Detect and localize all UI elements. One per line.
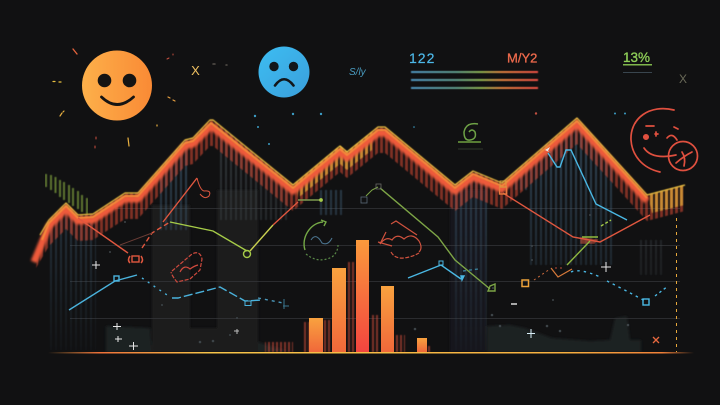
horizontal grid lines xyxy=(70,208,680,318)
bar chart xyxy=(265,240,432,352)
green circular arrow icon xyxy=(304,220,338,260)
red x marker xyxy=(653,337,659,343)
stat rules xyxy=(411,71,538,89)
faint specks xyxy=(109,214,629,343)
stat label 13% xyxy=(623,50,652,73)
sparkle marks around faces xyxy=(53,49,227,148)
mountain line chart band xyxy=(34,118,685,268)
stat label 122: 122 xyxy=(409,50,435,66)
stat label 13%: 13% xyxy=(623,50,650,65)
blue trend line left xyxy=(69,275,289,310)
sad face icon xyxy=(258,46,310,98)
baseline axis xyxy=(48,352,694,354)
x mark orange: X xyxy=(191,63,200,78)
dark background columns and skyline xyxy=(106,190,641,352)
x mark grey: X xyxy=(679,72,687,86)
red car-shape doodle xyxy=(171,253,202,282)
green hatch at far left xyxy=(46,174,87,214)
dashed right marker xyxy=(676,218,678,352)
happy face icon xyxy=(82,50,152,120)
red cloud doodle xyxy=(378,221,421,258)
white arrow tip xyxy=(545,147,551,153)
orange dotted connector xyxy=(522,268,572,286)
bar hatch xyxy=(265,262,432,352)
stat label M/Y2: M/Y2 xyxy=(507,50,537,66)
green spiral icon xyxy=(458,124,483,149)
green trend line xyxy=(170,184,611,291)
vertical hatch columns below ridge xyxy=(48,120,665,350)
red face with x badge xyxy=(631,109,698,172)
small plus markers xyxy=(92,261,611,350)
red trend line xyxy=(78,178,650,263)
blue trend line right xyxy=(408,150,668,305)
blue dots xyxy=(254,112,626,145)
label: small blue text: S/ly xyxy=(349,67,367,78)
